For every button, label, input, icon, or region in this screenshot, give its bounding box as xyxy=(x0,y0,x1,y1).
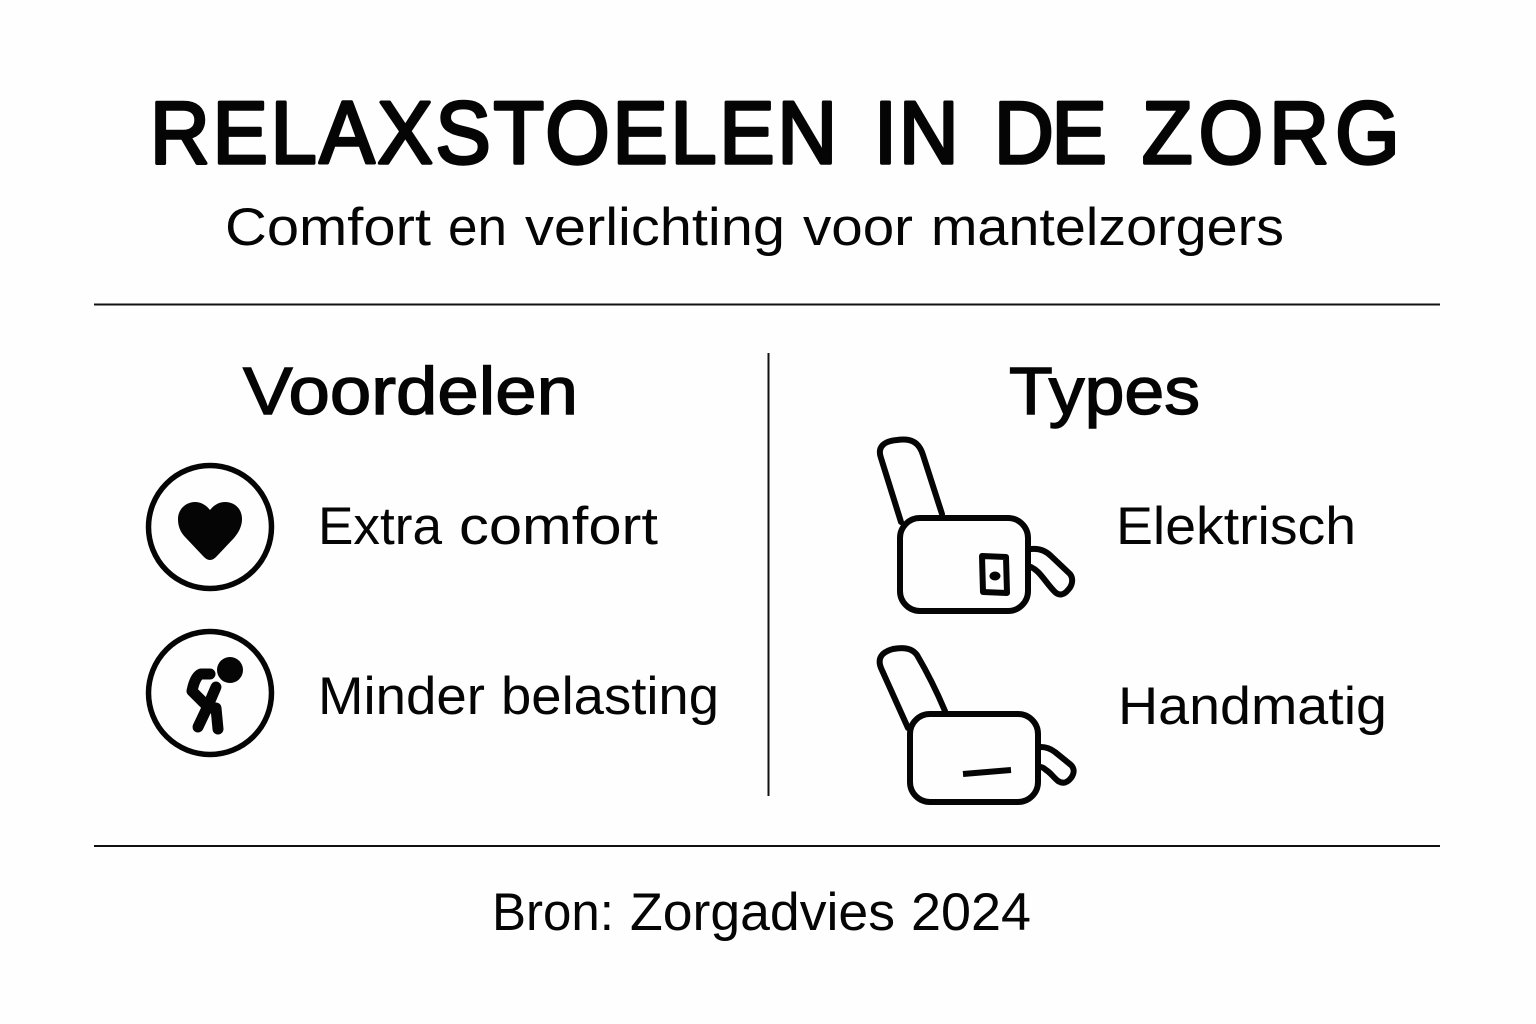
source: Bron: xyxy=(492,883,614,942)
title: IN xyxy=(874,85,959,183)
label: handmatig: Handmatig xyxy=(1118,677,1387,736)
subtitle: voor xyxy=(803,198,913,257)
source: 2024 xyxy=(911,883,1031,942)
title: DE xyxy=(994,85,1107,183)
subtitle xyxy=(225,198,1284,257)
source xyxy=(492,883,1031,942)
subtitle: en xyxy=(448,198,507,257)
label: extra comfort: comfort xyxy=(459,497,658,556)
label: minder belasting xyxy=(318,667,719,726)
title: RELAXSTOELEN xyxy=(150,85,837,183)
title: ZORG xyxy=(1142,85,1400,183)
heading: types: Types xyxy=(1009,354,1200,429)
label: minder belasting: belasting xyxy=(501,667,719,726)
subtitle: verlichting xyxy=(525,198,785,257)
icon: manual recliner xyxy=(880,648,1074,802)
subtitle: mantelzorgers xyxy=(931,198,1284,257)
panel: types xyxy=(880,354,1387,802)
icon: electric recliner xyxy=(880,440,1072,611)
source: Zorgadvies xyxy=(630,883,895,942)
panel: voordelen xyxy=(148,354,719,754)
label: extra comfort xyxy=(318,497,658,556)
icon: person carrying load in circle xyxy=(148,632,272,754)
title xyxy=(150,85,1400,183)
label: elektrisch: Elektrisch xyxy=(1116,497,1356,556)
label: minder belasting: Minder xyxy=(318,667,485,726)
icon: heart in circle xyxy=(148,466,272,588)
subtitle: Comfort xyxy=(225,198,431,257)
heading: voordelen: Voordelen xyxy=(243,354,578,429)
label: extra comfort: Extra xyxy=(318,497,443,556)
